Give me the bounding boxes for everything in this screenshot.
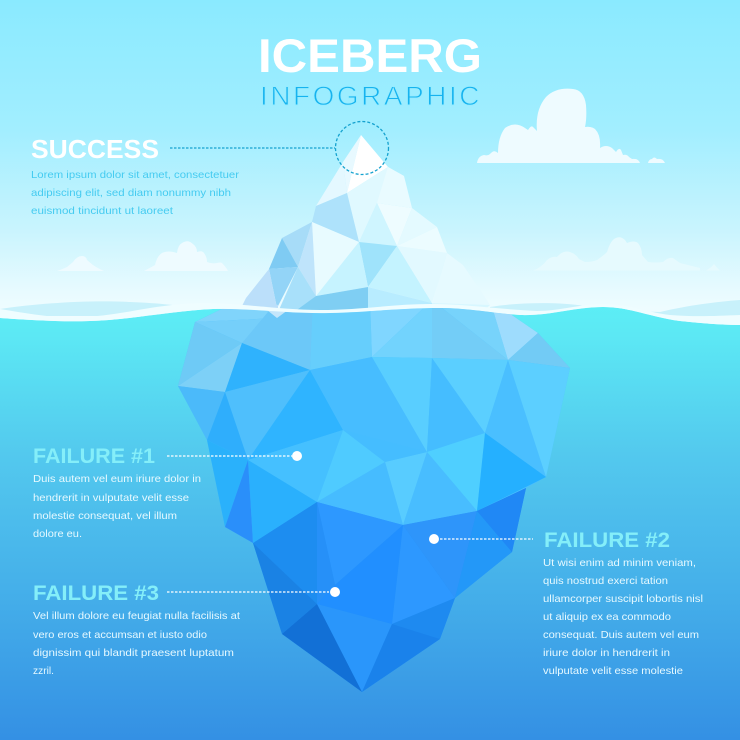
distant water left bbox=[0, 301, 200, 316]
callout: success: adipiscing elit, sed diam nonummy nibh bbox=[31, 187, 231, 199]
callout: failure 3: Vel illum dolore eu feugiat nulla facilisis at bbox=[33, 610, 240, 622]
water surface wave bbox=[0, 303, 740, 325]
callout: failure 2: iriure dolor in hendrerit in bbox=[543, 647, 670, 659]
cloud: left medium bbox=[144, 241, 228, 271]
callout: failure 2: Ut wisi enim ad minim veniam, bbox=[543, 557, 696, 569]
callout: failure 1: FAILURE #1 bbox=[33, 445, 155, 468]
iceberg: above water bbox=[240, 135, 490, 318]
sky background bbox=[0, 0, 740, 325]
cloud: right horizon bbox=[533, 237, 720, 270]
callout: failure 3: dignissim qui blandit praesent luptatum bbox=[33, 647, 234, 659]
failure 3 marker bbox=[167, 587, 340, 597]
callout: failure 2: ullamcorper suscipit lobortis nisl bbox=[543, 593, 703, 605]
callout: failure 3: FAILURE #3 bbox=[33, 582, 159, 605]
callout: failure 2 bbox=[543, 529, 703, 677]
callout: failure 3 bbox=[33, 582, 240, 677]
cloud: large top right bbox=[477, 89, 665, 163]
callout: failure 2: consequat. Duis autem vel eum bbox=[543, 629, 699, 641]
callout: success bbox=[31, 134, 240, 217]
callout: success: Lorem ipsum dolor sit amet, consectetuer bbox=[31, 169, 240, 181]
callout: failure 1: molestie consequat, vel illum bbox=[33, 510, 177, 522]
callout: success: SUCCESS bbox=[31, 134, 159, 164]
callout: failure 2: quis nostrud exerci tation bbox=[543, 575, 668, 587]
sea bbox=[0, 300, 740, 740]
title bbox=[258, 29, 482, 111]
callout: failure 2: vulputate velit esse molestie bbox=[543, 665, 683, 677]
callout: failure 1: dolore eu. bbox=[33, 528, 82, 540]
cloud: left small bbox=[57, 256, 104, 271]
callout: failure 3: zzril. bbox=[33, 665, 54, 677]
callout: failure 3: vero eros et accumsan et iusto odio bbox=[33, 629, 207, 641]
success marker bbox=[170, 122, 388, 174]
callout: failure 2: ut aliquip ex ea commodo bbox=[543, 611, 671, 623]
callout: failure 2: FAILURE #2 bbox=[544, 529, 670, 552]
callout: failure 1: Duis autem vel eum iriure dolor in bbox=[33, 473, 201, 485]
title: ICEBERG bbox=[258, 29, 482, 82]
distant water right bbox=[490, 300, 740, 320]
iceberg: below water bbox=[178, 300, 570, 692]
iceberg: submerged tip of pale facet bbox=[262, 306, 288, 318]
title: INFOGRAPHIC bbox=[260, 81, 482, 111]
failure 2 marker bbox=[429, 534, 533, 544]
callout: failure 1 bbox=[33, 445, 201, 540]
callout: failure 1: hendrerit in vulputate velit esse bbox=[33, 492, 189, 504]
failure 1 marker bbox=[167, 451, 302, 461]
callout: success: euismod tincidunt ut laoreet bbox=[31, 205, 173, 217]
